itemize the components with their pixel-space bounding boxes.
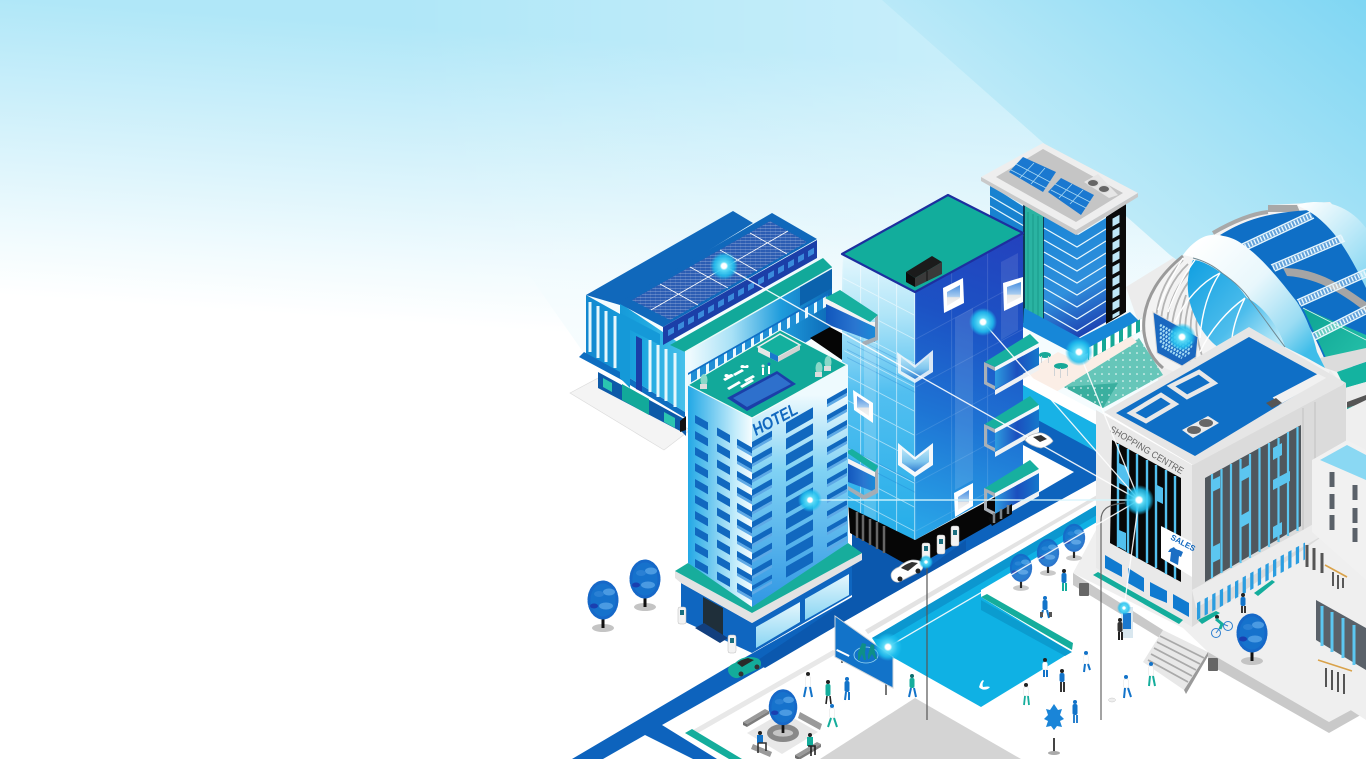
blue dome	[1220, 210, 1366, 370]
roof	[1104, 327, 1346, 465]
pool	[872, 505, 1097, 707]
pitch	[1303, 308, 1366, 360]
seated person	[757, 731, 766, 753]
person	[909, 674, 916, 697]
truss 1	[1240, 212, 1314, 251]
background diagonal panel	[882, 0, 1366, 400]
building: glass tower	[825, 195, 1053, 582]
cafe tables	[1039, 352, 1068, 378]
right wall	[915, 233, 1023, 540]
trusses	[1240, 212, 1366, 340]
ring shadow	[1347, 395, 1366, 408]
benches	[743, 709, 822, 759]
network node	[919, 555, 933, 569]
teal column	[1024, 204, 1044, 331]
left glass bands	[847, 318, 915, 540]
person	[1118, 618, 1122, 640]
black glazing	[1110, 440, 1181, 582]
background gradient	[0, 0, 1366, 440]
billboard	[835, 616, 893, 695]
hotel sign: HOTEL	[749, 401, 801, 440]
shop windows	[756, 574, 849, 648]
rim piece	[1268, 205, 1300, 212]
black window column	[1106, 204, 1126, 324]
teal band	[1337, 362, 1366, 388]
middle teal roof	[670, 258, 832, 352]
gray ribs	[1156, 260, 1206, 372]
network lines	[724, 266, 1139, 647]
window frame 1	[943, 278, 964, 313]
ledge underside	[675, 553, 862, 623]
skylights	[1131, 372, 1214, 421]
pool water	[872, 505, 1097, 707]
network node	[1117, 601, 1131, 615]
hotel ground right	[752, 565, 852, 653]
person	[1040, 596, 1052, 618]
teal ledge	[675, 543, 862, 613]
podium top	[1073, 400, 1366, 722]
shopping right wall	[1192, 383, 1346, 627]
hotel left wall	[688, 385, 752, 607]
upper left balcony	[825, 290, 878, 346]
outer rim	[1144, 256, 1183, 368]
network hub	[1124, 485, 1154, 515]
white car rear	[1025, 433, 1053, 448]
teal planter strip	[1093, 572, 1183, 624]
sidewalk edge	[865, 495, 1097, 634]
corner window 2	[898, 443, 933, 477]
person	[826, 680, 831, 704]
trees left	[589, 561, 659, 632]
pool ledge	[981, 594, 1073, 656]
ground floor	[598, 372, 686, 436]
truss 2	[1271, 235, 1345, 271]
person	[1084, 651, 1090, 672]
cyclist	[1215, 615, 1222, 629]
building: shopping centre	[1073, 327, 1366, 733]
roof planters	[700, 356, 832, 389]
video screen	[1153, 312, 1198, 366]
stadium plate	[1126, 258, 1366, 430]
glass facade	[1188, 260, 1285, 350]
solar block top	[618, 213, 817, 327]
right balcony 1	[984, 334, 1039, 395]
left glass grid	[842, 255, 915, 540]
window strip	[663, 249, 817, 336]
sales banner: SALES	[1169, 533, 1197, 554]
network node	[874, 633, 902, 661]
icon: EV charger front	[728, 635, 736, 653]
middle section wall	[685, 267, 832, 412]
small tree	[1044, 704, 1064, 755]
tower base	[1023, 308, 1140, 357]
person	[804, 672, 812, 697]
icon: roof fans	[1084, 174, 1118, 198]
hotel right wall	[752, 365, 848, 607]
person	[1042, 658, 1048, 677]
arch inner line	[1193, 258, 1285, 347]
pitch line	[1303, 308, 1366, 340]
tower reflection top	[1001, 253, 1018, 340]
green car	[728, 657, 761, 678]
road section under hotel	[755, 530, 966, 668]
rooftop unit	[906, 256, 942, 287]
window frame 2	[1003, 277, 1023, 311]
person with dog	[1108, 675, 1131, 702]
person	[828, 704, 837, 727]
store sign: SHOPPING CENTRE	[1108, 424, 1186, 476]
white car	[891, 560, 923, 582]
tower reflection band	[955, 308, 973, 490]
base ledge	[579, 352, 685, 418]
outer dome white	[1142, 202, 1366, 420]
dark section end	[800, 267, 832, 306]
icon: roof fans	[1182, 416, 1219, 438]
right storefront stripes	[1197, 551, 1305, 612]
left wing wall	[586, 295, 620, 376]
black base	[848, 488, 1012, 567]
white band	[1325, 370, 1366, 402]
icon: EV charger left	[678, 607, 686, 624]
truss 3	[1297, 269, 1366, 306]
totem	[1121, 607, 1133, 638]
icon: EV chargers	[922, 526, 959, 560]
teal kerb	[685, 729, 742, 759]
swan	[979, 680, 990, 690]
side entrance	[1307, 545, 1347, 589]
plaza diamond	[747, 712, 818, 754]
icon: solar panels	[632, 221, 807, 320]
roof edge line	[685, 268, 832, 352]
roof vent	[1266, 376, 1322, 408]
canal: upper	[1023, 385, 1097, 455]
left window	[853, 390, 873, 423]
light poles	[927, 503, 1125, 720]
tower front wall	[1044, 215, 1106, 338]
lower ring	[1320, 348, 1366, 372]
white edge of canal	[1023, 373, 1097, 425]
network node	[1168, 323, 1196, 351]
pool shaded band	[872, 505, 1097, 640]
tree pit	[767, 724, 799, 742]
roof slab	[981, 143, 1138, 230]
annex lower building	[1312, 600, 1366, 720]
building: solar tower	[981, 143, 1163, 408]
shopping right wall lower	[1192, 505, 1346, 608]
bicycle	[1212, 622, 1232, 638]
annex building	[1312, 440, 1366, 580]
background faint panel	[515, 230, 1170, 420]
tower side wall	[990, 185, 1024, 327]
person	[844, 677, 850, 700]
white plinth	[846, 500, 854, 532]
middle section colonnade	[688, 294, 828, 380]
lower left balcony	[846, 449, 878, 500]
lower sidewalk strip	[693, 650, 838, 733]
people	[757, 569, 1246, 756]
left wall windows	[702, 419, 744, 599]
sales banner	[1161, 526, 1197, 577]
hotel roof	[688, 330, 847, 418]
rear arch	[1297, 202, 1366, 288]
background light wash	[400, 0, 1366, 440]
forecourt plate	[570, 377, 690, 450]
rooftop pool	[727, 371, 796, 411]
plaza seating and tree	[743, 691, 822, 759]
white ribs	[1158, 258, 1245, 352]
network node	[1065, 338, 1093, 366]
bins	[1079, 583, 1218, 671]
plaza tree	[770, 691, 796, 737]
rooftop loungers	[723, 362, 770, 390]
roof slab edge	[981, 177, 1138, 235]
stairs	[1143, 630, 1208, 694]
teal plaza	[1064, 338, 1163, 408]
person	[1240, 593, 1246, 613]
lower teal	[1347, 402, 1366, 422]
left glass wall	[842, 255, 915, 540]
balcony vent	[988, 504, 1012, 526]
network node	[798, 488, 822, 512]
tree right	[1238, 615, 1266, 665]
blue roof	[1116, 337, 1324, 456]
building: stadium	[1126, 202, 1366, 430]
upper rim	[1213, 212, 1268, 233]
seated person	[807, 733, 815, 756]
network node	[969, 308, 997, 336]
right wall grid	[915, 233, 1023, 540]
roof	[842, 195, 1023, 292]
icon: solar array 2	[1048, 178, 1094, 215]
right balcony 3	[984, 460, 1039, 521]
rear roof	[586, 211, 753, 305]
podium front side	[1208, 652, 1366, 733]
shopping left wall	[1096, 410, 1192, 627]
person	[1024, 683, 1029, 705]
striped awning	[1088, 324, 1142, 354]
person	[1072, 700, 1078, 723]
person	[1062, 569, 1066, 591]
hotel ground left	[681, 583, 752, 653]
black block behind hotel	[810, 327, 845, 362]
inner gray ring	[1283, 268, 1366, 312]
storefronts	[1105, 555, 1189, 617]
right balcony 2	[984, 396, 1039, 457]
person	[1060, 669, 1064, 692]
right planters	[1198, 580, 1275, 624]
network node	[710, 252, 738, 280]
corner window 1	[897, 350, 933, 383]
pool trees	[1011, 525, 1084, 591]
front arch	[1183, 235, 1325, 368]
inner roof	[996, 149, 1123, 222]
right glazing	[1205, 425, 1301, 582]
centre wing wall	[620, 303, 685, 412]
road network	[572, 412, 1097, 759]
sidewalk band	[833, 480, 1097, 635]
icon: solar array 1	[1009, 157, 1056, 192]
person	[1148, 662, 1155, 686]
roof penthouse	[758, 334, 800, 362]
gray plaza	[820, 698, 1021, 759]
building: low-rise solar block	[570, 211, 845, 450]
truss 4	[1311, 306, 1366, 340]
lower window	[954, 483, 973, 517]
terrace	[1023, 335, 1137, 392]
building: hotel	[589, 330, 862, 678]
right wall windows	[762, 394, 837, 592]
right wall columns	[1303, 402, 1315, 532]
hotel door	[695, 597, 728, 643]
podium side	[1073, 573, 1163, 640]
